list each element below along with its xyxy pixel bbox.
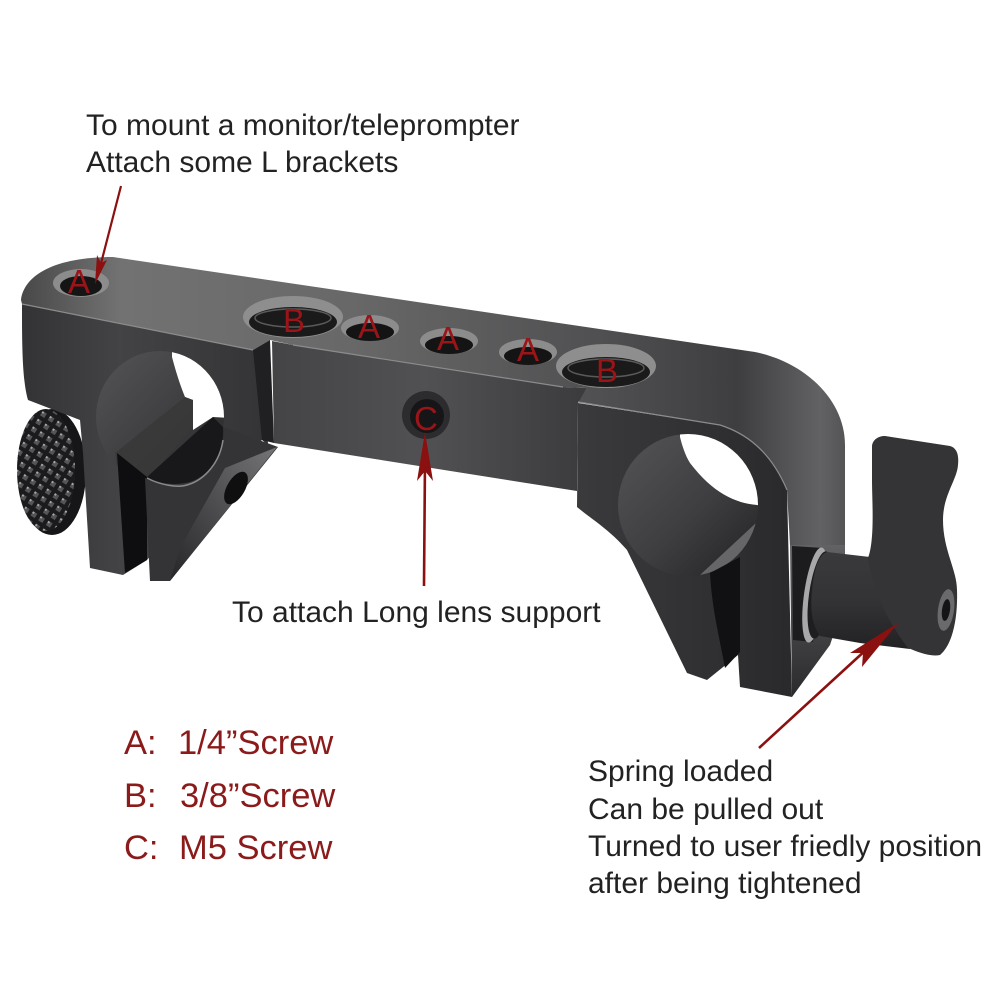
callout: top mount: Attach some L brackets xyxy=(86,146,398,179)
hole labels: A xyxy=(358,308,380,345)
right clamp slit xyxy=(710,557,740,668)
left rod hole xyxy=(96,351,224,476)
right rod hole xyxy=(618,434,758,575)
legend: screw types: C: xyxy=(124,829,158,867)
callout: spring loaded xyxy=(588,755,982,900)
left clamp block xyxy=(22,304,268,575)
callout: spring loaded: after being tightened xyxy=(588,867,862,900)
hole labels: A xyxy=(437,320,459,357)
hole labels: A xyxy=(68,263,90,300)
left thumb knob xyxy=(17,409,86,535)
legend: screw types: 1/4”Screw xyxy=(178,724,333,762)
left clamp slit xyxy=(117,453,147,573)
legend: screw types: M5 Screw xyxy=(179,829,332,867)
threaded holes xyxy=(53,269,656,439)
top face and curved side xyxy=(21,257,845,545)
arrow: to knob xyxy=(759,623,898,748)
hole labels: B xyxy=(596,352,618,389)
product: bracket xyxy=(17,257,958,697)
hole labels: C xyxy=(414,400,438,437)
right clamp side below xyxy=(790,545,845,697)
right locking lever xyxy=(792,436,958,655)
callout: long lens support: To attach Long lens support xyxy=(232,596,601,629)
callout: top mount xyxy=(86,109,520,179)
callout: spring loaded: Spring loaded xyxy=(588,755,773,788)
top edge highlights xyxy=(22,304,787,490)
arrow: to C hole xyxy=(417,432,433,586)
callout: spring loaded: Can be pulled out xyxy=(588,793,824,826)
legend: screw types: A: xyxy=(124,724,157,762)
legend: screw types xyxy=(124,724,335,867)
right clamp block and jaw xyxy=(577,403,792,697)
hole labels: A xyxy=(517,331,539,368)
arrow: to top hole xyxy=(95,186,121,284)
hole labels xyxy=(68,263,618,437)
beam notch strip xyxy=(253,340,274,443)
left clamp lower jaw xyxy=(145,417,278,581)
legend: screw types: B: xyxy=(124,777,157,815)
callout: spring loaded: Turned to user friedly position xyxy=(588,830,982,863)
callout: top mount: To mount a monitor/teleprompter xyxy=(86,109,520,142)
hole labels: B xyxy=(283,302,305,339)
infographic: rod clamp bracket diagram xyxy=(17,114,980,899)
legend: screw types: 3/8”Screw xyxy=(180,777,335,815)
center beam front xyxy=(272,341,587,491)
